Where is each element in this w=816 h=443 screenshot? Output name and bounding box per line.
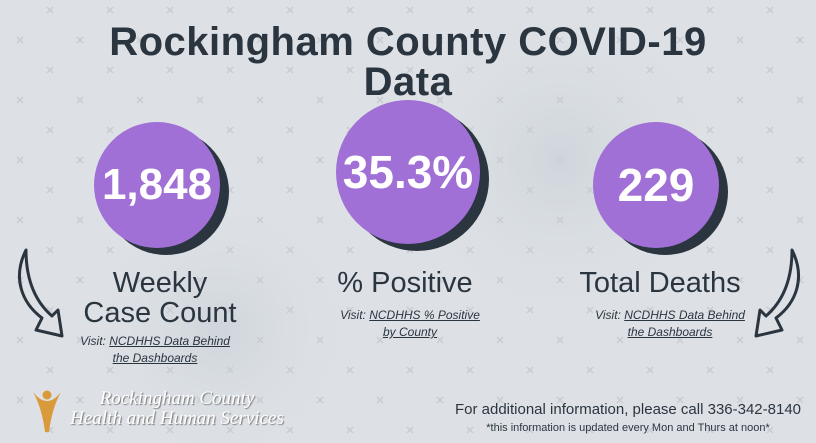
title: Rockingham County COVID-19 — [109, 20, 707, 64]
circle: percent positive — [336, 100, 480, 244]
icon: person — [33, 390, 61, 432]
link: deaths: the Dashboards — [628, 325, 712, 339]
link: deaths — [595, 308, 746, 339]
link: weekly: Visit: NCDHHS Data Behind — [80, 334, 230, 348]
link: deaths: Visit: NCDHHS Data Behind — [595, 308, 745, 322]
link: weekly: the Dashboards — [113, 351, 197, 365]
title — [109, 20, 707, 104]
link: weekly — [80, 334, 230, 365]
link: percent: by County — [383, 325, 437, 339]
arrow right — [754, 248, 800, 338]
arrow left — [18, 248, 64, 338]
footer info: For additional information, please call 336-342-8140 — [455, 401, 801, 418]
circle: total deaths: 229 — [618, 159, 694, 211]
link: percent: Visit: NCDHHS % Positive — [340, 308, 480, 322]
circle: weekly cases: 1,848 — [102, 160, 212, 209]
circle: total deaths — [593, 122, 719, 248]
label: total deaths: Total Deaths — [579, 267, 741, 299]
org name: Health and Human Services — [70, 408, 284, 429]
link: percent — [340, 308, 480, 339]
title: Data — [364, 60, 452, 104]
circle: percent positive: 35.3% — [343, 146, 473, 198]
label: weekly case count — [83, 267, 237, 329]
label: weekly case count: Weekly — [113, 267, 207, 299]
logo — [33, 388, 285, 432]
footer info: *this information is updated every Mon and Thurs at noon* — [486, 422, 770, 434]
footer info — [455, 401, 801, 434]
org name: Rockingham County — [100, 388, 254, 409]
label: weekly case count: Case Count — [83, 297, 237, 329]
circle: weekly cases — [94, 122, 220, 248]
org name — [70, 388, 285, 429]
label: percent positive: % Positive — [337, 267, 473, 299]
